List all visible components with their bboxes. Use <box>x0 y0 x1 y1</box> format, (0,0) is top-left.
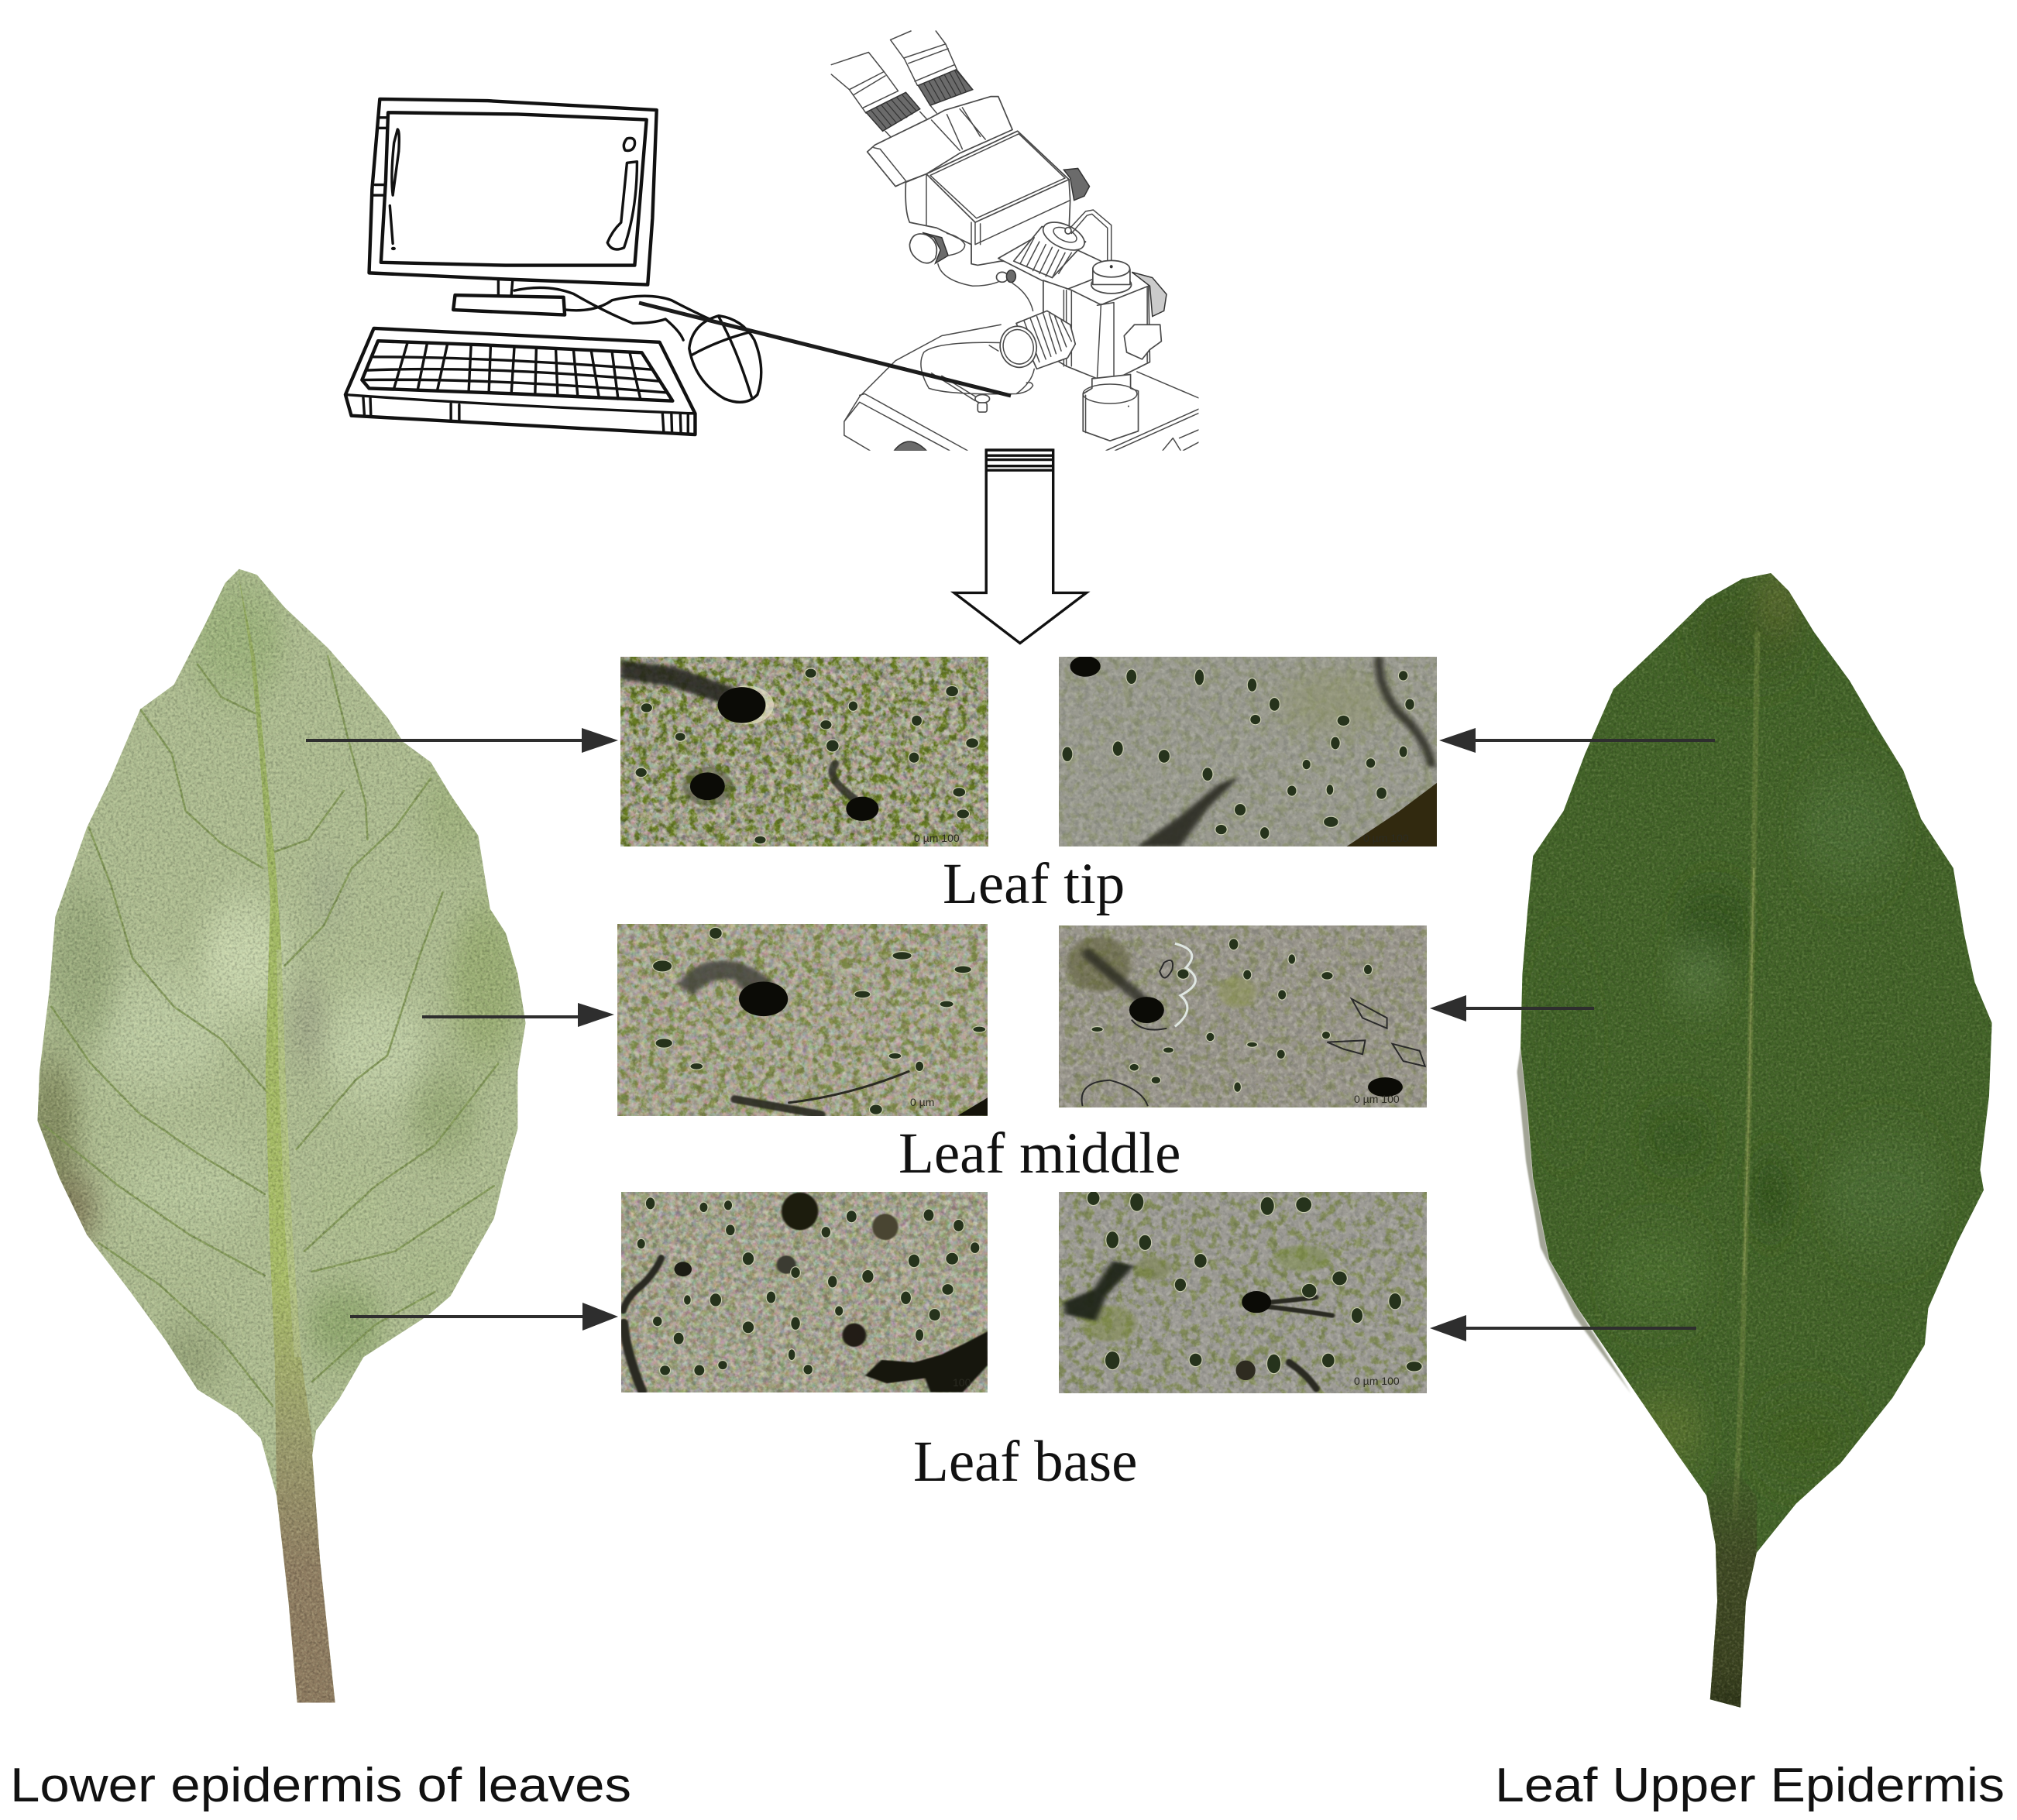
micrograph: leaf tip, lower epidermis <box>620 657 988 846</box>
arrow: leaf base right <box>1430 1315 1696 1341</box>
scale bar label: 0 µm 100 <box>1354 1375 1400 1387</box>
label: leaf upper epidermis: Leaf Upper Epidermis <box>1495 1759 2005 1812</box>
illustration: microscope <box>831 31 1198 451</box>
micrograph: leaf base, lower epidermis <box>621 1192 988 1392</box>
label: lower epidermis of leaves: Lower epidermis of leaves <box>10 1759 631 1812</box>
label: leaf tip: Leaf tip <box>943 852 1125 916</box>
midrib <box>1735 632 1758 1520</box>
arrows: lower epidermis leaf to micrographs <box>306 728 618 1331</box>
petiole <box>1706 1455 1757 1715</box>
fine focus and lamp wire <box>998 210 1112 290</box>
eyepieces <box>831 31 973 136</box>
coarse focus knob <box>999 310 1077 370</box>
arrow: leaf middle right <box>1430 995 1594 1022</box>
leaf cast shadow <box>1517 1047 1631 1394</box>
monitor <box>369 99 657 285</box>
monitor stand and cables <box>453 279 719 340</box>
scale bar label: 0 µm 100 <box>1363 832 1409 844</box>
micrograph: leaf middle, upper epidermis <box>1059 925 1427 1107</box>
scale bar label: 0 µm 100 <box>914 832 960 844</box>
illustration: computer <box>345 99 761 434</box>
label: leaf middle: Leaf middle <box>899 1121 1180 1186</box>
stand and base <box>844 325 1198 451</box>
mouse <box>689 316 761 402</box>
arrows: upper epidermis leaf to micrographs <box>1430 728 1715 1341</box>
scale bar label: 0 µm <box>910 1096 934 1108</box>
side veins <box>43 656 498 1406</box>
micrograph: leaf base, upper epidermis <box>1059 1191 1427 1393</box>
midrib and petiole <box>239 575 335 1702</box>
hollow arrow pointing down <box>954 450 1087 643</box>
photo: upper epidermis leaf <box>1456 542 2017 1750</box>
scale bar label: 0 µm 100 <box>1354 1093 1400 1105</box>
arrow: leaf base left <box>350 1303 618 1331</box>
keyboard <box>345 328 695 434</box>
leaf surface speckle <box>37 568 525 1702</box>
photo: lower epidermis leaf <box>37 568 526 1702</box>
scale bar label: 100 <box>953 1376 971 1389</box>
arrow: leaf tip left <box>306 728 618 753</box>
leaf blade tones <box>1456 542 2017 1750</box>
leaf surface speckle <box>1456 542 2017 1750</box>
arrow: leaf tip right <box>1439 728 1715 753</box>
connector line from computer to microscope <box>639 303 1011 396</box>
focus block <box>938 260 1167 380</box>
leaf blade tones <box>37 568 526 1702</box>
micrograph: leaf middle, lower epidermis <box>617 924 988 1116</box>
micrograph: leaf tip, upper epidermis <box>1059 656 1437 846</box>
binocular head <box>868 97 1090 265</box>
arrow: leaf middle left <box>422 1003 614 1027</box>
label: leaf base: Leaf base <box>913 1430 1137 1494</box>
